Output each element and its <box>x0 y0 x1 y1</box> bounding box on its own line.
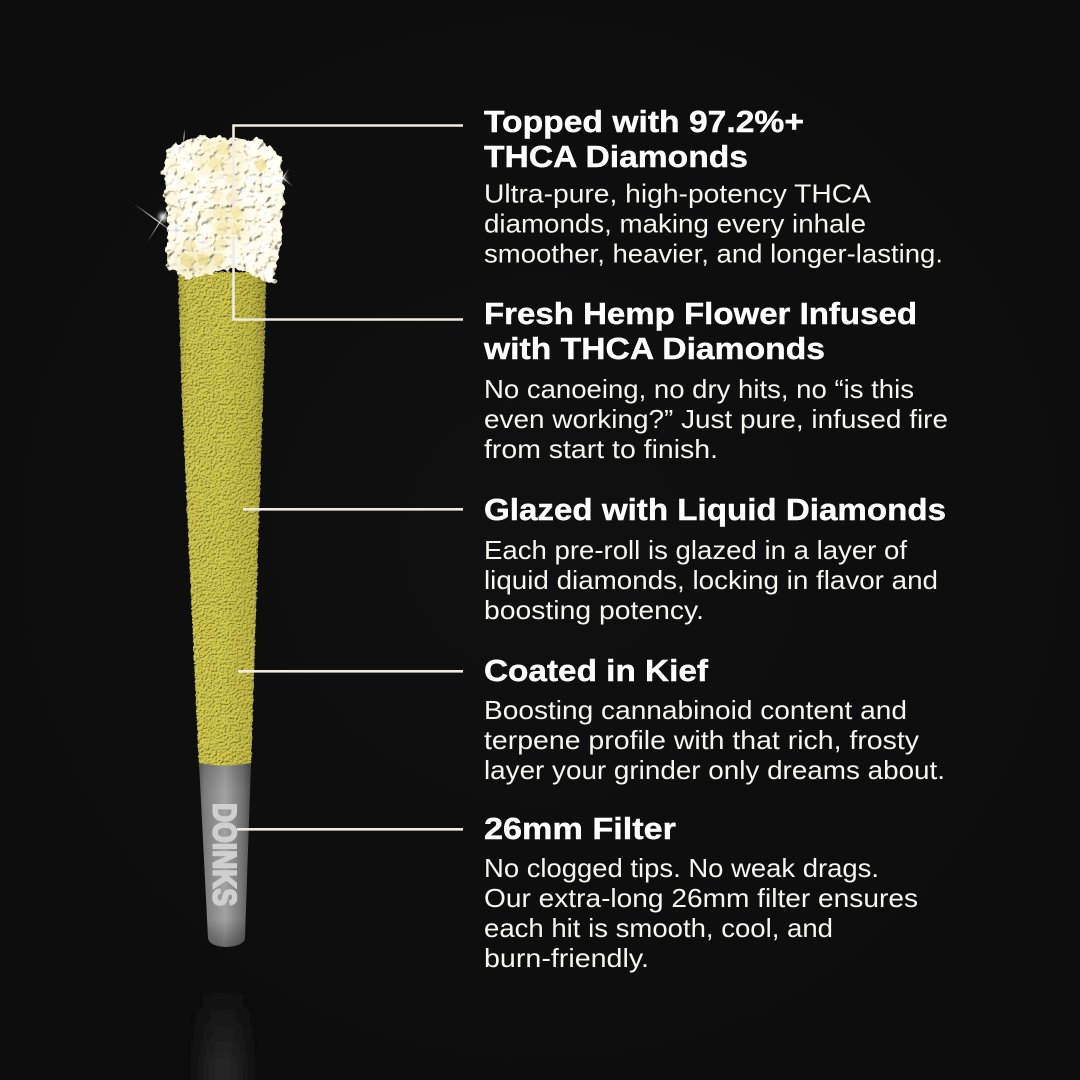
body: hemp flower <box>484 374 948 464</box>
heading: Fresh Hemp Flower <box>483 297 917 366</box>
body: glaze: liquid diamonds, locking in flavor and <box>484 565 938 595</box>
callout line: crystal cap <box>234 126 463 320</box>
body: filter <box>484 853 918 973</box>
heading: Topped with: THCA Diamonds <box>484 140 748 174</box>
body: glaze <box>484 535 938 625</box>
body: glaze: Each pre-roll is glazed in a layer of <box>484 535 908 565</box>
diamond crystal cap <box>162 136 285 283</box>
body: hemp flower: No canoeing, no dry hits, no “is this <box>484 374 914 404</box>
heading: Glazed: Glazed with Liquid Diamonds <box>484 493 946 527</box>
body: hemp flower: even working?” Just pure, infused fire <box>484 404 948 434</box>
text block: glaze <box>484 493 946 625</box>
heading: Topped with <box>484 105 804 174</box>
body: diamonds: Ultra-pure, high-potency THCA <box>484 178 872 208</box>
heading: Fresh Hemp Flower: with THCA Diamonds <box>483 332 825 366</box>
body: diamonds: diamonds, making every inhale <box>484 208 866 238</box>
grey filter tip <box>199 763 251 947</box>
callout line: filter <box>237 828 463 831</box>
kief coated cone body <box>178 272 266 766</box>
text block: filter <box>484 812 918 973</box>
text block: hemp flower <box>483 297 948 464</box>
yellow crystal tints <box>173 142 252 274</box>
body: filter: No clogged tips. No weak drags. <box>484 853 879 883</box>
body: kief: Boosting cannabinoid content and <box>484 695 907 725</box>
crystal shards <box>165 138 285 281</box>
pre-roll cone illustration <box>162 136 285 947</box>
body: kief: layer your grinder only dreams about. <box>484 755 945 785</box>
text block: diamonds <box>484 105 943 268</box>
body: filter: each hit is smooth, cool, and <box>484 913 833 943</box>
heading: Topped with: Topped with 97.2%+ <box>484 105 804 139</box>
body: filter: burn-friendly. <box>484 943 649 973</box>
text block: kief <box>484 654 945 785</box>
callout line: glaze <box>243 508 463 511</box>
body: kief: terpene profile with that rich, frosty <box>484 725 919 755</box>
callout line: kief <box>238 670 463 673</box>
sparkle right <box>273 168 293 188</box>
body: hemp flower: from start to finish. <box>484 434 718 464</box>
floor reflection <box>203 985 243 1080</box>
body: glaze: boosting potency. <box>484 595 704 625</box>
body: kief <box>484 695 945 785</box>
body: diamonds: smoother, heavier, and longer-lasting. <box>484 238 943 268</box>
body: diamonds <box>484 178 943 268</box>
heading: Fresh Hemp Flower: Fresh Hemp Flower Infused <box>484 297 917 331</box>
DOINKS logo on filter: DOINKS <box>206 803 242 906</box>
body: filter: Our extra-long 26mm filter ensures <box>484 883 918 913</box>
sparkle left <box>134 204 177 242</box>
heading: Coated in Kief: Coated in Kief <box>484 654 709 688</box>
sparkles <box>134 129 293 242</box>
sparkle small <box>183 129 185 145</box>
heading: 26mm Filter: 26mm Filter <box>484 812 676 846</box>
